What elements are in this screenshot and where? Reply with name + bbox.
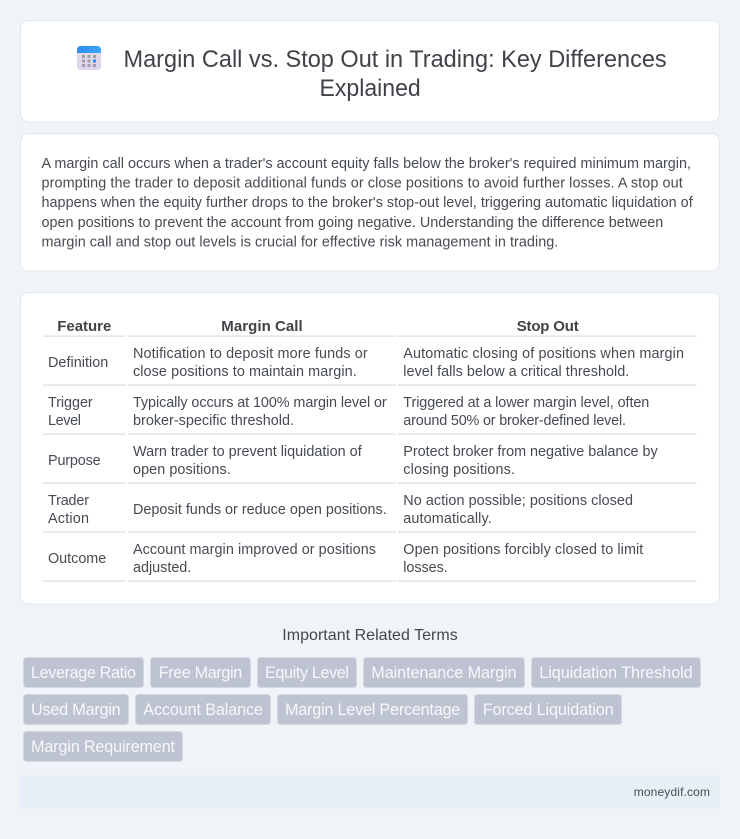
row: trigger level: broker-specific threshold. — [133, 413, 294, 429]
row: outcome — [43, 542, 697, 582]
row: definition: level falls below a critical threshold. — [403, 364, 629, 380]
tag: used margin: Used Margin — [31, 701, 121, 719]
row: trader action: automatically. — [403, 511, 492, 527]
icon: calendar — [77, 46, 101, 70]
row: outcome: Open positions forcibly closed to limit — [403, 542, 643, 558]
intro paragraph: open positions to prevent the account from going negative. Understanding the difference between — [42, 215, 663, 231]
row: trigger level: around 50% or broker-defined level. — [403, 413, 626, 429]
intro paragraph: A margin call occurs when a trader's account equity falls below the broker's required minimum margin, — [42, 156, 691, 172]
intro paragraph: prompting the trader to deposit additional funds or close positions to avoid further losses. A stop out — [42, 176, 683, 192]
row: trader action: Deposit funds or reduce open positions. — [133, 502, 387, 518]
tag: equity level: Equity Level — [265, 664, 349, 682]
tag: liquidation threshold — [532, 658, 700, 688]
row: outcome: adjusted. — [133, 560, 191, 576]
row: definition: Notification to deposit more funds or — [133, 346, 368, 362]
tag: margin level percentage: Margin Level Percentage — [285, 701, 460, 719]
row: definition: close positions to maintain margin. — [133, 364, 357, 380]
tag: free margin — [150, 658, 250, 688]
title: Margin Call vs. Stop Out in Trading: Key Differences — [124, 46, 667, 73]
row: purpose: closing positions. — [403, 462, 515, 478]
title: Explained — [320, 75, 421, 102]
tag: liquidation threshold: Liquidation Threshold — [539, 664, 693, 682]
intro paragraph: happens when the equity further drops to the broker's stop-out level, triggering automatic liquidation of — [42, 195, 694, 211]
row: trigger level: Typically occurs at 100% margin level or — [133, 395, 387, 411]
row: outcome: losses. — [403, 560, 448, 576]
intro text card — [20, 134, 720, 271]
tag: equity level — [258, 658, 356, 688]
row: trigger level — [43, 395, 697, 435]
row: trigger level: Trigger — [48, 395, 93, 411]
row: trader action — [43, 493, 697, 533]
footer source: moneydif.com — [634, 785, 710, 799]
title — [124, 46, 667, 102]
related terms heading: Important Related Terms — [282, 627, 458, 644]
row: definition — [43, 346, 697, 386]
tag: maintenance margin — [364, 658, 524, 688]
row: definition: Definition — [48, 355, 108, 371]
related term tags — [24, 658, 700, 762]
row: trigger level: Triggered at a lower margin level, often — [403, 395, 649, 411]
row: trigger level: Level — [48, 413, 81, 429]
table header: Feature — [57, 318, 111, 335]
tag: forced liquidation — [474, 694, 622, 724]
intro paragraph: margin call and stop out levels is crucial for effective risk management in trading. — [42, 234, 558, 250]
row: trader action: Trader — [48, 493, 89, 509]
row: definition: Automatic closing of positions when margin — [403, 346, 684, 362]
row: purpose: Protect broker from negative balance by — [403, 444, 658, 460]
row: purpose: open positions. — [133, 462, 231, 478]
row: trader action: Action — [48, 511, 89, 527]
tag: used margin — [24, 694, 128, 724]
tag: margin requirement: Margin Requirement — [31, 738, 176, 756]
tag: account balance: Account Balance — [143, 701, 263, 719]
intro paragraph — [42, 156, 694, 250]
tag: free margin: Free Margin — [159, 664, 242, 682]
tag: margin requirement — [24, 732, 182, 762]
table header — [43, 318, 697, 337]
tag: leverage ratio: Leverage Ratio — [31, 664, 136, 682]
row: trader action: No action possible; positions closed — [403, 493, 633, 509]
tag: margin level percentage — [278, 694, 468, 724]
row: purpose: Warn trader to prevent liquidation of — [133, 444, 363, 460]
row: outcome: Account margin improved or positions — [133, 542, 376, 558]
footer bar — [20, 775, 720, 809]
table header: Margin Call — [221, 318, 303, 335]
row: purpose — [43, 444, 697, 484]
row: purpose: Purpose — [48, 453, 101, 469]
header card — [20, 20, 720, 122]
comparison table card — [20, 292, 720, 604]
row: outcome: Outcome — [48, 551, 106, 567]
table header: Stop Out — [517, 318, 579, 335]
tag: maintenance margin: Maintenance Margin — [371, 664, 517, 682]
tag: account balance — [136, 694, 270, 724]
tag: forced liquidation: Forced Liquidation — [483, 701, 614, 719]
tag: leverage ratio — [24, 658, 144, 688]
